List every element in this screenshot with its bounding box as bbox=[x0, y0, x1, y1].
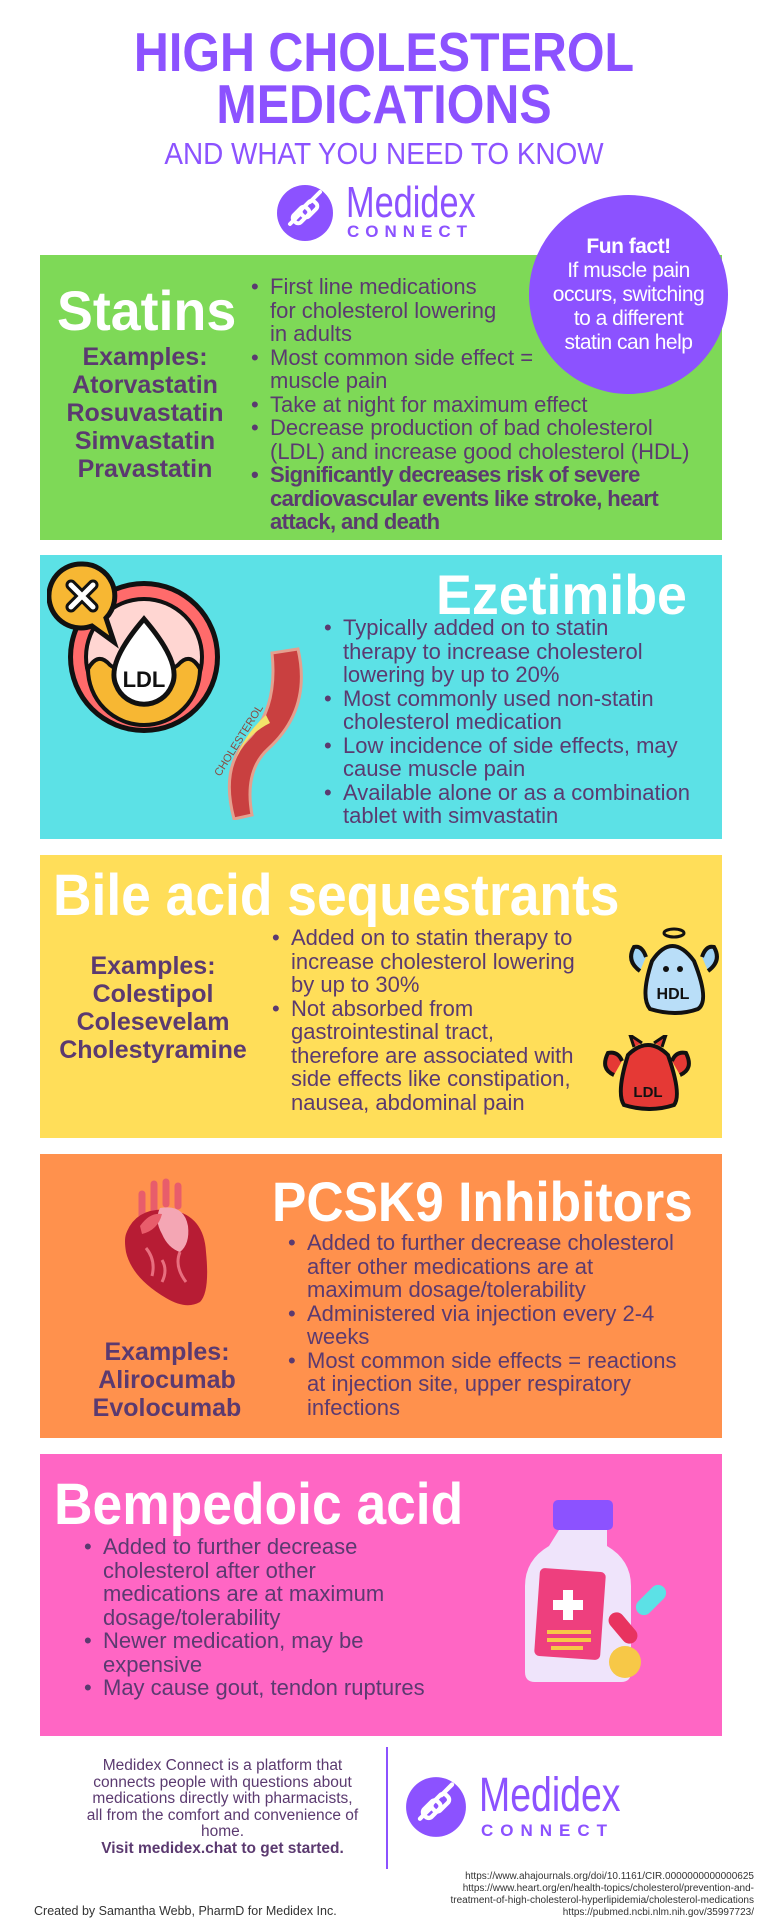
bullets: ezetimibe: lowering by up to 20% bbox=[343, 662, 559, 687]
logo: footer bbox=[406, 1769, 621, 1840]
examples: statins: Rosuvastatin bbox=[66, 399, 223, 427]
text block: footer description: home. bbox=[201, 1823, 244, 1840]
callout: fun fact: If muscle pain bbox=[567, 259, 690, 282]
heading: bempedoic: Bempedoic acid bbox=[54, 1472, 463, 1537]
callout: fun fact: statin can help bbox=[565, 331, 692, 354]
references: https://www.ahajournals.org/doi/10.1161/CIR.0000000000000625 bbox=[465, 1871, 754, 1882]
callout: fun fact bbox=[529, 195, 728, 394]
bullets: PCSK9: weeks bbox=[307, 1324, 369, 1349]
bullets: PCSK9: Administered via injection every 2-4 bbox=[307, 1300, 654, 1326]
bullets: statins: Take at night for maximum effect bbox=[270, 392, 588, 416]
panel: PCSK9 inhibitors bbox=[40, 1154, 722, 1438]
bullets: PCSK9 bbox=[288, 1230, 676, 1420]
bullets: statins: First line medications bbox=[270, 274, 477, 299]
title bbox=[134, 21, 634, 135]
references: treatment-of-high-cholesterol-hyperlipidemia/cholesterol-medications bbox=[451, 1895, 754, 1906]
bullets: bile: Added on to statin therapy to bbox=[291, 925, 572, 950]
bullets: PCSK9: Most common side effects = reactions bbox=[307, 1348, 676, 1372]
examples: statins: Simvastatin bbox=[75, 427, 215, 455]
examples: PCSK9: Examples: bbox=[104, 1338, 230, 1366]
callout: fun fact: occurs, switching bbox=[553, 283, 704, 306]
bullets: bempedoic: May cause gout, tendon ruptures bbox=[103, 1675, 425, 1700]
examples: PCSK9 bbox=[93, 1338, 241, 1422]
heading: Ezetimibe: Ezetimibe bbox=[436, 563, 687, 626]
examples: bile: Colesevelam bbox=[77, 1008, 229, 1036]
examples: bile bbox=[59, 952, 247, 1064]
bullets: statins: muscle pain bbox=[270, 368, 387, 393]
examples: statins bbox=[66, 343, 223, 483]
bullets: ezetimibe: Available alone or as a combination bbox=[343, 780, 690, 804]
text block: footer description bbox=[87, 1757, 358, 1857]
bullets: bile: gastrointestinal tract, bbox=[291, 1019, 494, 1044]
bullets: ezetimibe: Low incidence of side effects, may bbox=[343, 732, 678, 758]
text block: footer description: all from the comfort and convenience of bbox=[87, 1807, 358, 1824]
logo: top bbox=[277, 178, 476, 241]
bullets: PCSK9: infections bbox=[307, 1394, 400, 1420]
callout: fun fact: Fun fact! bbox=[586, 235, 671, 258]
bullets: bile: increase cholesterol lowering bbox=[291, 948, 575, 974]
logo: top: Medidex bbox=[346, 178, 476, 227]
subtitle: AND WHAT YOU NEED TO KNOW bbox=[164, 136, 604, 171]
bullets: bempedoic: Newer medication, may be bbox=[103, 1628, 363, 1653]
references: https://pubmed.ncbi.nlm.nih.gov/35997723/ bbox=[563, 1907, 754, 1918]
title: MEDICATIONS bbox=[216, 73, 552, 135]
icon: artery bbox=[212, 647, 303, 820]
bullets: ezetimibe: cause muscle pain bbox=[343, 756, 525, 781]
bullets: statins: cardiovascular events like stroke, heart bbox=[270, 486, 658, 510]
bullets: bempedoic bbox=[84, 1534, 425, 1700]
icon: LDL blocked bbox=[47, 562, 220, 733]
bullets: statins: (LDL) and increase good cholesterol (HDL) bbox=[270, 438, 689, 464]
bullets: statins: attack, and death bbox=[270, 509, 440, 534]
bullets: PCSK9: after other medications are at bbox=[307, 1254, 593, 1278]
bullets: bempedoic: dosage/tolerability bbox=[103, 1604, 280, 1630]
examples: bile: Examples: bbox=[90, 952, 216, 980]
examples: bile: Cholestyramine bbox=[59, 1036, 247, 1064]
icon: HDL angel: HDL bbox=[657, 986, 690, 1003]
panel: ezetimibe bbox=[40, 555, 722, 839]
bullets: PCSK9: at injection site, upper respiratory bbox=[307, 1371, 631, 1396]
icon: LDL devil: LDL bbox=[633, 1084, 663, 1101]
bullets: statins bbox=[252, 274, 689, 534]
icon: heart bbox=[125, 1178, 208, 1306]
bullets: PCSK9: maximum dosage/tolerability bbox=[307, 1277, 586, 1302]
icon: pill bottle bbox=[525, 1500, 666, 1682]
references: https://www.heart.org/en/health-topics/cholesterol/prevention-and- bbox=[463, 1883, 754, 1894]
bullets: bile: nausea, abdominal pain bbox=[291, 1090, 525, 1114]
examples: statins: Pravastatin bbox=[78, 455, 212, 483]
bullets: statins: Significantly decreases risk of severe bbox=[270, 462, 640, 487]
logo: footer: Medidex bbox=[479, 1769, 621, 1822]
text block: footer description: Visit medidex.chat to get started. bbox=[101, 1840, 344, 1857]
bullets: bempedoic: medications are at maximum bbox=[103, 1581, 384, 1606]
bullets: bempedoic: expensive bbox=[103, 1652, 202, 1676]
text block: footer description: Medidex Connect is a platform that bbox=[103, 1757, 342, 1774]
heading: PCSK9: PCSK9 Inhibitors bbox=[272, 1170, 693, 1233]
bullets: PCSK9: Added to further decrease cholesterol bbox=[307, 1230, 674, 1255]
panel: bile acid sequestrants bbox=[40, 855, 722, 1138]
bullets: bile: therefore are associated with bbox=[291, 1042, 574, 1068]
bullets: ezetimibe: Most commonly used non-statin bbox=[343, 686, 654, 710]
logo: footer: CONNECT bbox=[481, 1821, 614, 1840]
examples: bile: Colestipol bbox=[93, 980, 213, 1008]
bullets: bile: by up to 30% bbox=[291, 972, 419, 997]
heading: bile acid: Bile acid sequestrants bbox=[53, 863, 619, 928]
bullets: statins: for cholesterol lowering bbox=[270, 298, 496, 322]
bullets: bempedoic: cholesterol after other bbox=[103, 1558, 316, 1582]
bullets: statins: Decrease production of bad cholesterol bbox=[270, 415, 653, 440]
examples: PCSK9: Evolocumab bbox=[93, 1394, 241, 1422]
bullets: bile: side effects like constipation, bbox=[291, 1066, 571, 1091]
examples: PCSK9: Alirocumab bbox=[98, 1366, 236, 1394]
bullets: ezetimibe bbox=[324, 615, 690, 828]
bullets: bempedoic: Added to further decrease bbox=[103, 1534, 357, 1559]
icon: LDL devil bbox=[603, 1035, 691, 1111]
text block: footer description: medications directly with pharmacists, bbox=[92, 1790, 353, 1807]
references bbox=[450, 1871, 754, 1918]
bullets: statins: in adults bbox=[270, 321, 352, 346]
panel: bempedoic acid bbox=[40, 1454, 722, 1736]
bullets: bile: Not absorbed from bbox=[291, 996, 473, 1020]
examples: statins: Atorvastatin bbox=[72, 371, 218, 399]
heading: Statins: Statins bbox=[57, 279, 236, 342]
icon: HDL angel bbox=[629, 928, 719, 1015]
title: HIGH CHOLESTEROL bbox=[134, 21, 634, 83]
bullets: ezetimibe: cholesterol medication bbox=[343, 709, 562, 734]
panel: statins bbox=[40, 255, 722, 540]
icon: LDL blocked: LDL bbox=[123, 667, 165, 692]
bullets: statins: Most common side effect = bbox=[270, 344, 533, 370]
text block: footer description: connects people with questions about bbox=[93, 1774, 352, 1791]
bullets: ezetimibe: Typically added on to statin bbox=[343, 615, 608, 640]
examples: statins: Examples: bbox=[82, 343, 208, 371]
icon: artery: CHOLESTEROL bbox=[212, 703, 266, 779]
credit: Created by Samantha Webb, PharmD for Medidex Inc. bbox=[34, 1904, 337, 1918]
logo: top: CONNECT bbox=[347, 222, 473, 241]
bullets: ezetimibe: therapy to increase cholesterol bbox=[343, 638, 643, 664]
callout: fun fact: to a different bbox=[574, 307, 683, 330]
bullets: ezetimibe: tablet with simvastatin bbox=[343, 803, 558, 828]
bullets: bile bbox=[272, 925, 575, 1114]
